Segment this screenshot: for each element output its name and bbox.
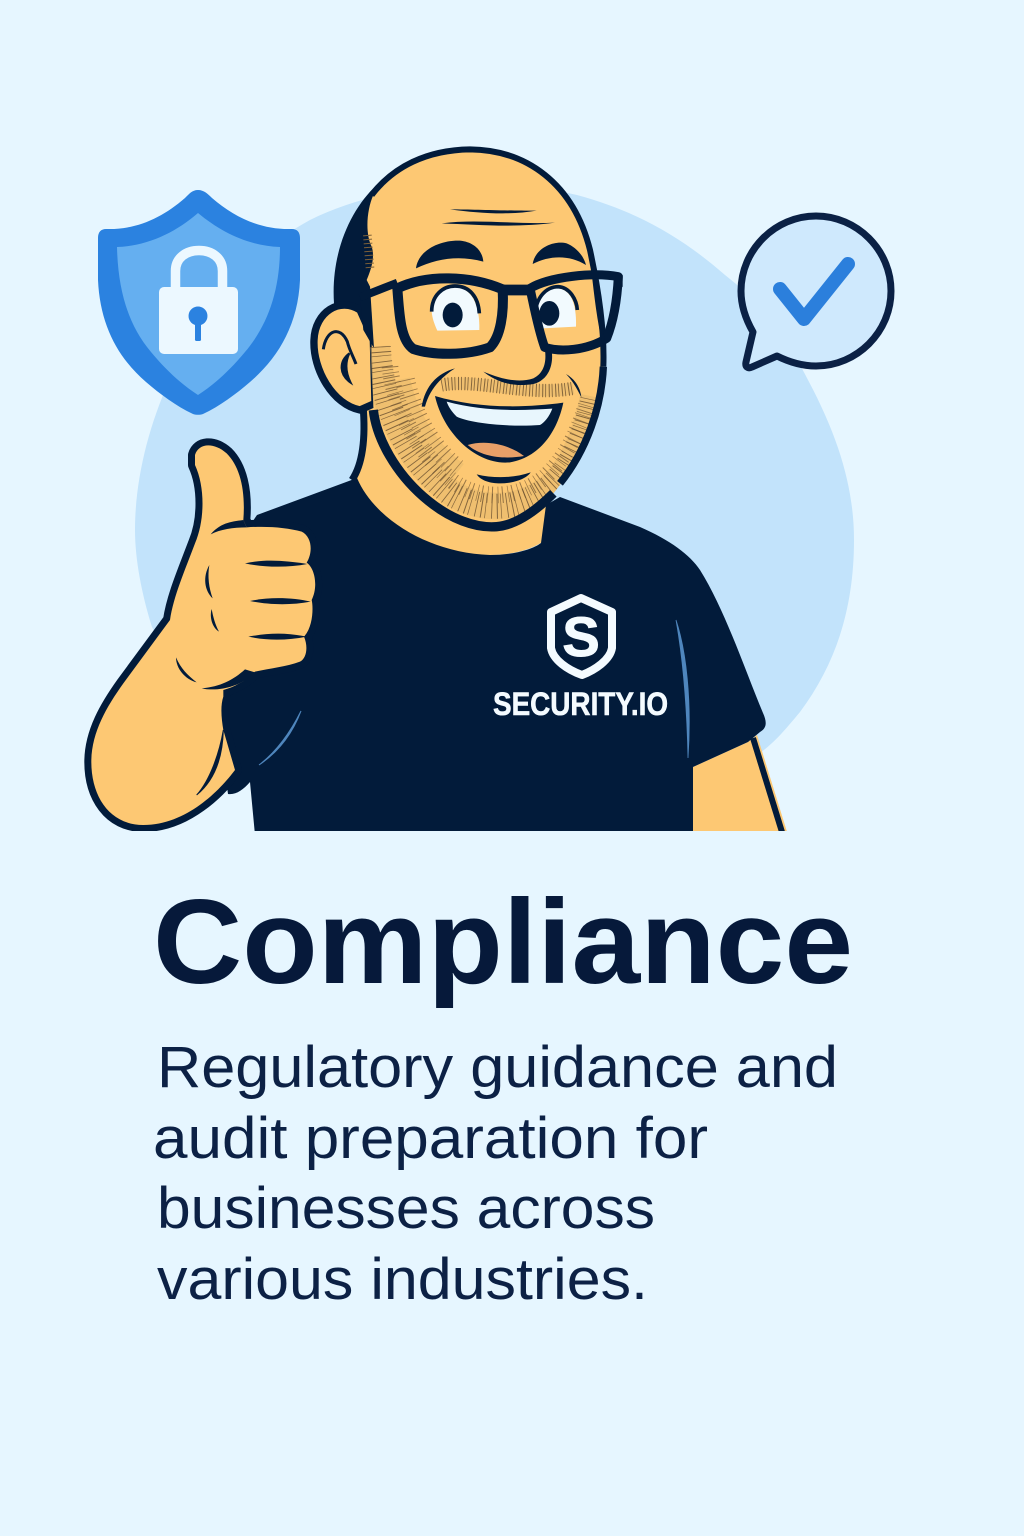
right lens <box>530 275 618 350</box>
finger line 1 <box>245 561 307 567</box>
finger line 3 <box>248 634 307 640</box>
stubble hatch left <box>405 380 457 468</box>
illustration: background circle <box>135 185 854 753</box>
right eye <box>535 287 577 328</box>
lower lip <box>477 472 531 483</box>
tongue <box>468 443 524 457</box>
line 1: Regulatory guidance and <box>157 1035 838 1100</box>
left pupil <box>443 303 463 327</box>
hand shape <box>91 445 315 825</box>
right eye lid <box>535 287 577 315</box>
title: Compliance <box>153 875 853 1009</box>
lock body <box>159 287 238 354</box>
shirt highlight right <box>676 620 689 758</box>
shield inner <box>117 213 280 395</box>
temple stubble <box>367 235 370 268</box>
glasses <box>360 273 618 354</box>
left eye <box>432 286 479 331</box>
jaw line <box>373 410 553 527</box>
head outline <box>372 149 604 367</box>
right cheek line <box>560 367 603 483</box>
keyhole <box>189 306 207 341</box>
bubble <box>741 216 891 368</box>
line 3: businesses across <box>157 1176 655 1241</box>
icon: security shield with lock <box>98 190 300 415</box>
right eyebrow <box>533 243 586 265</box>
neck <box>352 405 550 555</box>
stubble tone left <box>398 380 457 473</box>
right eye white <box>536 288 576 328</box>
forehead wrinkle 1 <box>450 209 537 213</box>
stubble tone <box>377 347 593 506</box>
shield outer <box>98 190 300 415</box>
check mark <box>780 264 848 319</box>
right pupil <box>539 301 559 326</box>
finger line 2 <box>250 598 311 604</box>
wrist crease <box>176 657 197 682</box>
mouth <box>435 396 563 463</box>
logo letter: S <box>562 605 600 668</box>
fist lower edge <box>202 669 255 689</box>
moustache tone <box>442 384 573 391</box>
head edge behind lens <box>593 273 604 343</box>
left eyebrow <box>416 241 483 268</box>
line 4: various industries. <box>157 1247 648 1312</box>
left eye white <box>432 287 479 331</box>
face fill <box>367 149 604 527</box>
hand and forearm <box>91 445 315 825</box>
line 2: audit preparation for <box>153 1106 708 1171</box>
t-shirt <box>215 478 766 835</box>
icon: speech bubble with check mark <box>741 216 891 368</box>
knuckle crease 2 <box>211 609 219 632</box>
knuckle crease 1 <box>205 565 213 598</box>
right arm outline <box>753 738 782 832</box>
bridge <box>502 274 532 306</box>
hair side wedge <box>362 287 374 348</box>
nose <box>483 350 552 385</box>
hair <box>334 186 375 306</box>
head <box>314 149 623 527</box>
right smile line <box>566 374 581 397</box>
teeth <box>447 402 552 426</box>
left eye lid <box>432 286 479 313</box>
ear <box>314 305 375 410</box>
ear inner <box>323 332 356 364</box>
forehead wrinkle 2 <box>442 222 555 226</box>
right arm <box>693 735 788 835</box>
left lens <box>397 278 503 354</box>
thumb crease <box>211 520 247 534</box>
description text <box>153 1035 838 1312</box>
shirt logo <box>493 598 668 722</box>
lock shackle <box>176 250 222 290</box>
moustache hatch <box>442 384 573 391</box>
stubble hatch outer <box>378 347 593 506</box>
shirt highlight left <box>259 711 301 765</box>
stubble <box>377 347 593 506</box>
neck left outline <box>352 405 364 480</box>
logo wordmark: SECURITY.IO <box>493 686 668 722</box>
temple end <box>615 273 623 292</box>
illustration: person giving thumbs up <box>91 149 788 835</box>
forearm crease <box>197 730 223 795</box>
logo shield <box>551 598 612 675</box>
stubble hatch inner <box>390 367 587 495</box>
left smile line <box>422 368 455 407</box>
temple arm <box>360 283 397 297</box>
ear inner fold <box>342 353 351 383</box>
